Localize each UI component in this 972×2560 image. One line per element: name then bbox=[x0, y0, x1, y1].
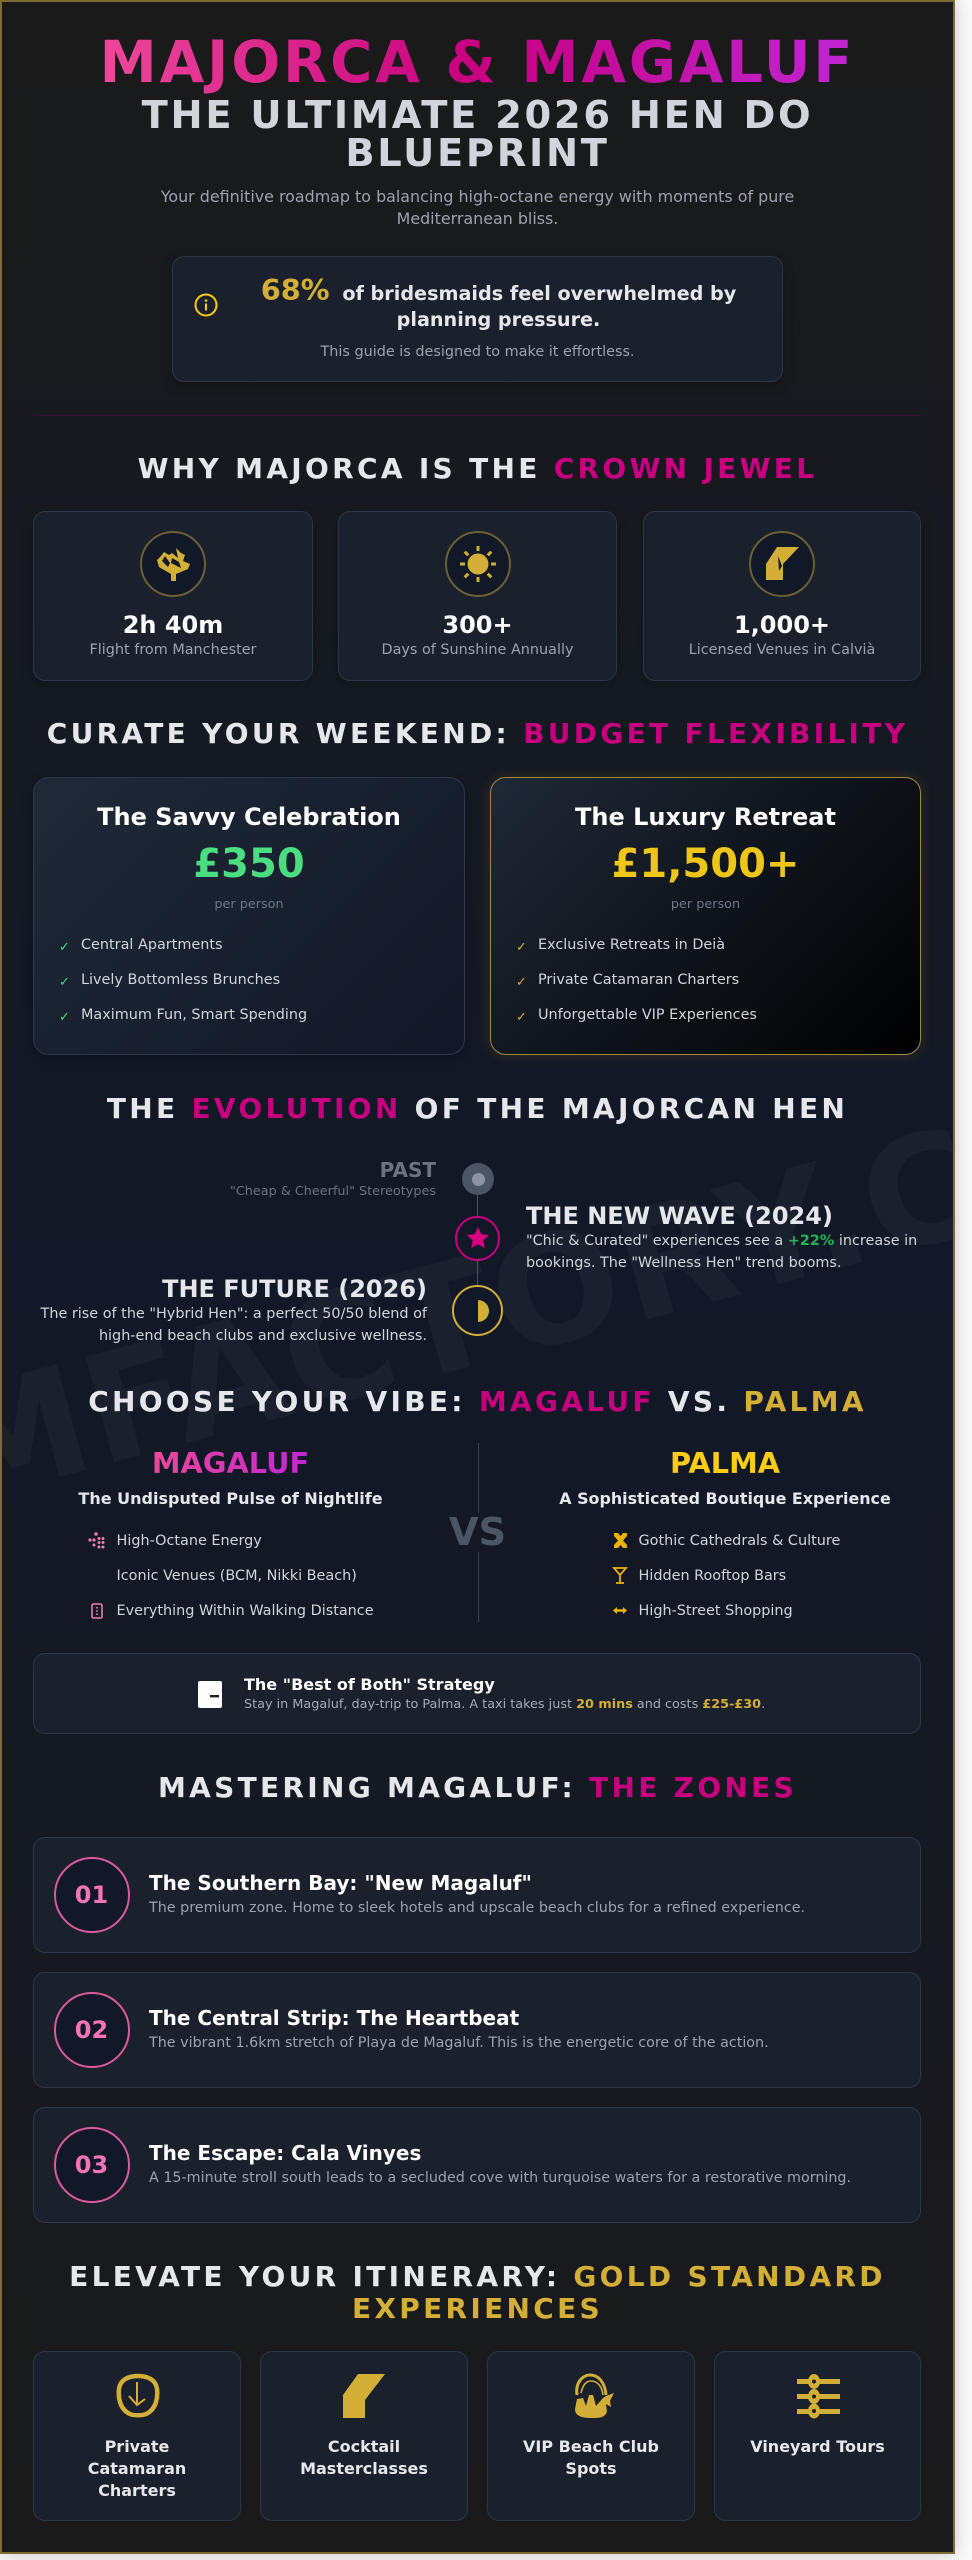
stat card: flight bbox=[33, 511, 313, 681]
palma list bbox=[612, 1533, 840, 1619]
icon: flight bbox=[140, 531, 206, 597]
icon: info bbox=[194, 294, 218, 316]
magaluf list bbox=[88, 1532, 374, 1619]
experience card: cocktail bbox=[260, 2351, 468, 2521]
icon: martini bbox=[612, 1567, 628, 1584]
icon: cathedral bbox=[614, 1533, 627, 1548]
icon: vineyard sliders bbox=[797, 2374, 840, 2418]
stat label: Licensed Venues in Calvià bbox=[689, 642, 875, 658]
budget list: ✓ bbox=[59, 1010, 70, 1025]
icon: catamaran bbox=[116, 2374, 160, 2418]
timeline node: past bbox=[462, 1163, 494, 1195]
zone description: A 15-minute stroll south leads to a secluded cove with turquoise waters for a restorative morning. bbox=[149, 2170, 851, 2186]
icon: sun bbox=[444, 531, 510, 597]
timeline text: past: PAST bbox=[380, 1158, 436, 1182]
callout body: Stay in Magaluf, day-trip to Palma. A taxi takes just 20 mins and costs £25-£30. bbox=[244, 1697, 765, 1712]
callout title: The "Best of Both" Strategy bbox=[244, 1675, 495, 1694]
budget list bbox=[59, 937, 307, 1025]
magaluf subtitle: The Undisputed Pulse of Nightlife bbox=[78, 1489, 383, 1508]
experience card: VIP beach club bbox=[487, 2351, 695, 2521]
timeline bbox=[40, 1158, 917, 1344]
heading: evolution: THE EVOLUTION OF THE MAJORCAN HEN bbox=[107, 1092, 848, 1125]
heading: zones: MASTERING MAGALUF: THE ZONES bbox=[158, 1771, 797, 1804]
timeline text: new wave: bookings. The "Wellness Hen" trend booms. bbox=[526, 1255, 841, 1271]
budget list: ✓ bbox=[59, 975, 70, 990]
magaluf list: Everything Within Walking Distance bbox=[116, 1603, 374, 1619]
callout note: This guide is designed to make it effortless. bbox=[320, 344, 635, 360]
budget list: ✓ bbox=[59, 940, 70, 955]
experience label: Private bbox=[105, 2437, 169, 2456]
experience label: Spots bbox=[565, 2459, 617, 2478]
timeline text: future: THE FUTURE (2026) bbox=[162, 1275, 427, 1303]
title: MAJORCA & MAGALUF bbox=[100, 29, 855, 96]
zone card: southern bay bbox=[33, 1837, 921, 1953]
budget list: Unforgettable VIP Experiences bbox=[538, 1007, 757, 1023]
budget price: £1,500+ bbox=[612, 841, 799, 887]
budget list: Central Apartments bbox=[81, 937, 222, 953]
zone description: The vibrant 1.6km stretch of Playa de Magaluf. This is the energetic core of the action. bbox=[149, 2035, 769, 2051]
zone number: 03 bbox=[75, 2151, 108, 2179]
callout: best of both bbox=[33, 1653, 921, 1734]
zone number: 02 bbox=[75, 2016, 108, 2044]
heading: gold standard bbox=[69, 2260, 886, 2325]
panel: luxury budget bbox=[490, 777, 921, 1055]
panel: savvy budget bbox=[33, 777, 465, 1055]
icon: beach club bbox=[575, 2374, 614, 2418]
tagline bbox=[160, 187, 794, 228]
zone description: The premium zone. Home to sleek hotels and upscale beach clubs for a refined experience. bbox=[149, 1900, 805, 1916]
timeline text: past: "Cheap & Cheerful" Stereotypes bbox=[230, 1184, 436, 1199]
heading: gold standard: ELEVATE YOUR ITINERARY: GOLD STANDARD bbox=[69, 2260, 886, 2293]
zone card: central strip bbox=[33, 1972, 921, 2088]
zone number: 01 bbox=[75, 1881, 108, 1909]
budget list: Exclusive Retreats in Deià bbox=[538, 937, 725, 953]
palma subtitle: A Sophisticated Boutique Experience bbox=[559, 1489, 891, 1508]
palma list: High-Street Shopping bbox=[638, 1603, 793, 1619]
experience label: Charters bbox=[98, 2481, 176, 2500]
icon: taxi pass bbox=[198, 1681, 222, 1708]
stat card: sunshine bbox=[338, 511, 617, 681]
timeline text: new wave: THE NEW WAVE (2024) bbox=[526, 1202, 833, 1230]
experience card: catamaran bbox=[33, 2351, 241, 2521]
panel: magaluf bbox=[78, 1446, 383, 1619]
budget title: The Savvy Celebration bbox=[97, 803, 401, 831]
tagline: Your definitive roadmap to balancing high-octane energy with moments of pure bbox=[161, 187, 794, 206]
budget list: Lively Bottomless Brunches bbox=[81, 972, 280, 988]
budget title: The Luxury Retreat bbox=[575, 803, 836, 831]
icon: cocktail bbox=[343, 2374, 385, 2418]
timeline node: future bbox=[452, 1285, 503, 1336]
heading: choose your vibe: CHOOSE YOUR VIBE: MAGALUF VS. PALMA bbox=[88, 1385, 867, 1418]
palma list: Gothic Cathedrals & Culture bbox=[638, 1533, 840, 1549]
timeline text: new wave bbox=[526, 1202, 917, 1271]
zone title: The Central Strip: The Heartbeat bbox=[149, 2006, 519, 2030]
icon: arrows bbox=[613, 1607, 627, 1614]
zone number bbox=[54, 1992, 130, 2068]
timeline text: new wave: "Chic & Curated" experiences see a +22% increase in bbox=[526, 1233, 917, 1249]
subtitle: THE ULTIMATE 2026 HEN DO bbox=[142, 93, 813, 138]
timeline text: future bbox=[40, 1275, 428, 1344]
experience label: VIP Beach Club bbox=[523, 2437, 659, 2456]
zone title: The Southern Bay: "New Magaluf" bbox=[149, 1871, 532, 1895]
stat label: Days of Sunshine Annually bbox=[381, 642, 574, 658]
palma title: PALMA bbox=[670, 1446, 780, 1480]
experience label: Masterclasses bbox=[300, 2459, 428, 2478]
statistic text: 68% of bridesmaids feel overwhelmed by bbox=[261, 273, 736, 307]
icon: walking distance bbox=[91, 1603, 103, 1619]
budget list: Maximum Fun, Smart Spending bbox=[81, 1007, 307, 1023]
tagline: Mediterranean bliss. bbox=[397, 209, 558, 228]
zone card: the escape bbox=[33, 2107, 921, 2223]
subtitle bbox=[142, 93, 813, 176]
budget unit: per person bbox=[214, 897, 284, 912]
magaluf list: High-Octane Energy bbox=[116, 1533, 262, 1549]
stat label: Flight from Manchester bbox=[90, 642, 256, 658]
experience label bbox=[523, 2437, 659, 2478]
budget unit: per person bbox=[671, 897, 740, 912]
heading: budget flexibility: CURATE YOUR WEEKEND: BUDGET FLEXIBILITY bbox=[47, 717, 908, 750]
budget list bbox=[516, 937, 757, 1025]
experience label bbox=[88, 2437, 186, 2500]
experience card: vineyard bbox=[714, 2351, 921, 2521]
palma list: Hidden Rooftop Bars bbox=[638, 1568, 786, 1584]
experience label: Vineyard Tours bbox=[750, 2437, 885, 2456]
timeline node: new wave bbox=[455, 1216, 500, 1261]
stat value: 300+ bbox=[442, 611, 513, 639]
icon: venue bbox=[749, 531, 815, 597]
budget list: ✓ bbox=[516, 975, 527, 990]
statistic text: planning pressure. bbox=[397, 308, 600, 331]
budget list: Private Catamaran Charters bbox=[538, 972, 739, 988]
stat value: 2h 40m bbox=[123, 611, 223, 639]
timeline text: future: The rise of the "Hybrid Hen": a perfect 50/50 blend of bbox=[41, 1306, 427, 1322]
magaluf list: Iconic Venues (BCM, Nikki Beach) bbox=[116, 1568, 357, 1584]
stat value: 1,000+ bbox=[734, 611, 830, 639]
callout: planning pressure statistic bbox=[172, 256, 783, 382]
experience label: Cocktail bbox=[328, 2437, 400, 2456]
heading: gold standard: EXPERIENCES bbox=[352, 2292, 603, 2325]
panel: palma bbox=[559, 1446, 891, 1619]
experience label bbox=[300, 2437, 428, 2478]
magaluf title: MAGALUF bbox=[152, 1446, 309, 1480]
subtitle: BLUEPRINT bbox=[345, 131, 610, 176]
experience label: Catamaran bbox=[88, 2459, 186, 2478]
budget list: ✓ bbox=[516, 1010, 527, 1025]
icon: energy bbox=[88, 1532, 104, 1548]
timeline text: past bbox=[230, 1158, 436, 1199]
zone number bbox=[54, 1857, 130, 1933]
statistic text bbox=[261, 273, 736, 331]
budget list: ✓ bbox=[516, 940, 527, 955]
zone title: The Escape: Cala Vinyes bbox=[149, 2141, 421, 2165]
zone number bbox=[54, 2127, 130, 2203]
budget price: £350 bbox=[193, 841, 305, 887]
heading: crown jewel: WHY MAJORCA IS THE CROWN JEWEL bbox=[138, 452, 817, 485]
VS badge: VS bbox=[449, 1510, 506, 1555]
timeline text: future: high-end beach clubs and exclusive wellness. bbox=[99, 1328, 427, 1344]
stat card: venues bbox=[643, 511, 921, 681]
